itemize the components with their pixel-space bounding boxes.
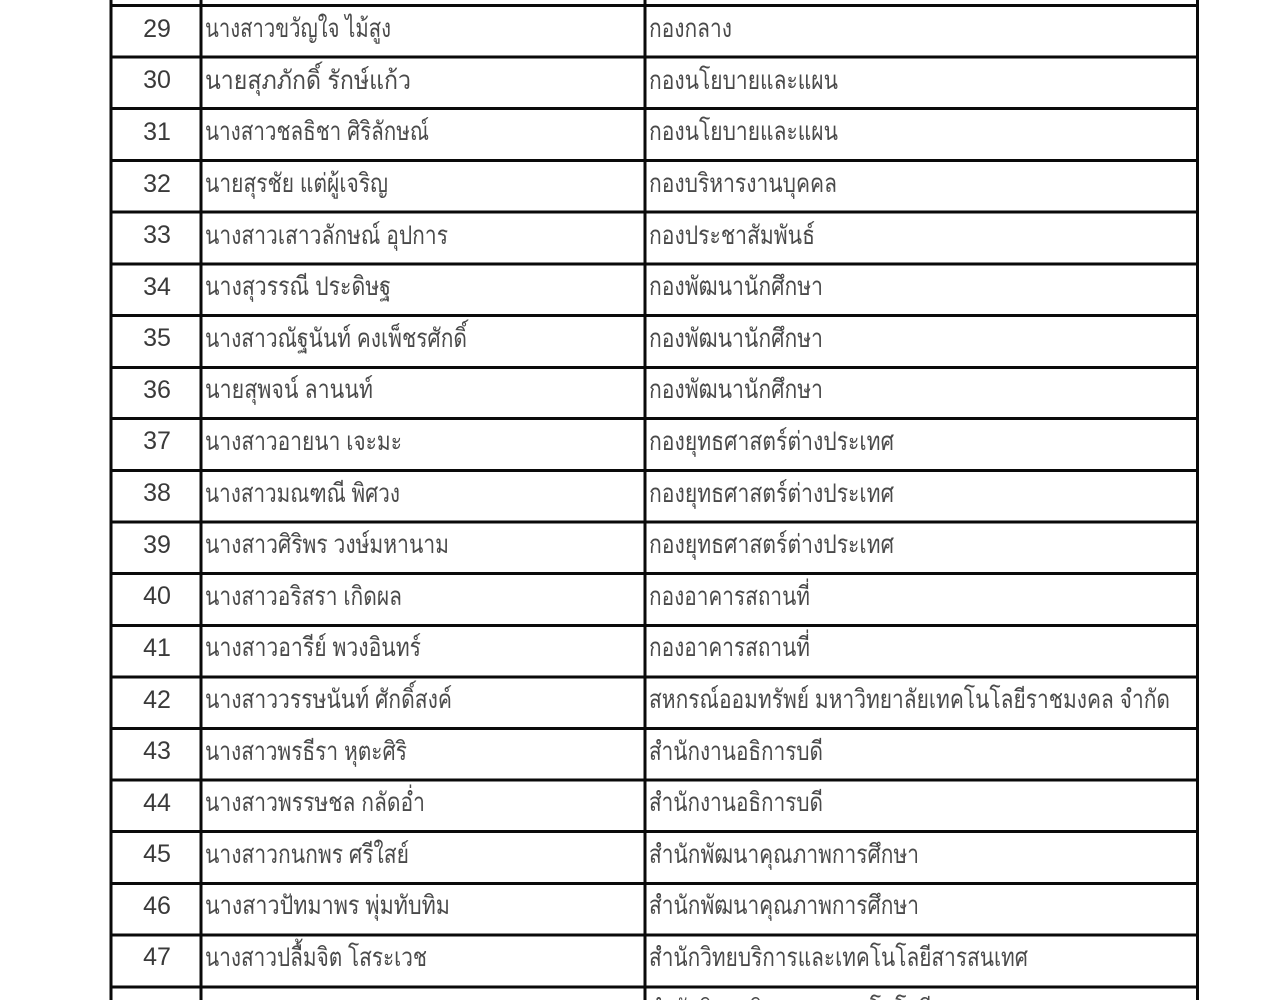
row 46: นางสาวปัทมาพร พุ่มทับทิม [205,890,450,921]
row 38: กองยุทธศาสตร์ต่างประเทศ [649,478,894,509]
row 41 [143,629,810,662]
row 35: นางสาวณัฐนันท์ คงเพ็ชรศักดิ์ [205,319,469,354]
row 39: นางสาวศิริพร วงษ์มหานาม [205,529,449,559]
row 40: กองอาคารสถานที่ [649,578,810,611]
row 33 [143,220,815,251]
row 44 [143,784,823,817]
row 40: นางสาวอริสรา เกิดผล [205,581,402,611]
row 45: นางสาวกนกพร ศรีใสย์ [205,839,409,869]
row 35 [143,319,823,354]
row 39: กองยุทธศาสตร์ต่างประเทศ [649,529,894,560]
row 45 [143,839,919,870]
row 29: นางสาวขวัญใจ ไม้สูง [205,13,391,44]
row 44: สำนักงานอธิการบดี [649,787,823,817]
row 32: กองบริหารงานบุคคล [649,168,837,199]
row 45: 45 [143,840,171,868]
row 46: สำนักพัฒนาคุณภาพการศึกษา [649,890,919,921]
row 42: สหกรณ์ออมทรัพย์ มหาวิทยาลัยเทคโนโลยีราชมงคล จำกัด [649,684,1170,714]
row 31: กองนโยบายและแผน [649,116,838,146]
row 47 [143,938,1028,972]
row 37: 37 [143,427,171,455]
row 30: กองนโยบายและแผน [649,65,838,95]
row 38: นางสาวมณฑณี พิศวง [205,478,400,508]
row 30: 30 [143,66,171,94]
row 36: 36 [143,376,171,404]
row 44: 44 [143,789,171,817]
row 34 [143,271,823,302]
row 46: 46 [143,892,171,920]
row 36: กองพัฒนานักศึกษา [649,374,823,404]
row 32: นายสุรชัย แต่ผู้เจริญ [205,168,388,199]
row 35: กองพัฒนานักศึกษา [649,323,823,353]
row 43: สำนักงานอธิการบดี [649,736,823,766]
row 34: นางสุวรรณี ประดิษฐ [205,271,391,302]
row 47: 47 [143,943,171,971]
row 45: สำนักพัฒนาคุณภาพการศึกษา [649,839,919,870]
row 40 [143,578,810,611]
row 38 [143,478,894,509]
row 41: กองอาคารสถานที่ [649,629,810,662]
row 38: 38 [143,479,171,507]
row 41: นางสาวอารีย์ พวงอินทร์ [205,632,421,662]
row 41: 41 [143,634,171,662]
row 29: 29 [143,15,171,43]
row 36: นายสุพจน์ ลานนท์ [205,374,373,405]
row 34: 34 [143,273,171,301]
row 39 [143,529,894,560]
row 33: นางสาวเสาวลักษณ์ อุปการ [205,220,448,251]
row 32 [143,168,837,199]
row 37: กองยุทธศาสตร์ต่างประเทศ [649,426,894,457]
row 43 [143,736,823,767]
row 30: นายสุภภักดิ์ รักษ์แก้ว [205,61,411,96]
row 37 [143,426,894,457]
row 30 [143,61,838,96]
row 29 [143,13,732,44]
row 37: นางสาวอายนา เจะมะ [205,426,402,456]
row 31: 31 [143,118,171,146]
row 34: กองพัฒนานักศึกษา [649,271,823,301]
row 42: 42 [143,686,171,714]
row 33: กองประชาสัมพันธ์ [649,220,815,250]
row 42 [143,680,1170,714]
row 35: 35 [143,324,171,352]
row 32: 32 [143,170,171,198]
row 40: 40 [143,582,171,610]
row 44: นางสาวพรรษชล กลัดอ่ำ [205,784,425,817]
row 42: นางสาววรรษนันท์ ศักดิ์สงค์ [205,680,452,714]
row 43: นางสาวพรธีรา หุตะศิริ [205,736,407,767]
row 48, clipped at the page edge [143,994,1028,1000]
row 43: 43 [143,737,171,765]
row 46 [143,890,919,921]
row 39: 39 [143,531,171,559]
row 36 [143,374,823,405]
row 47: นางสาวปลื้มจิต โสระเวช [205,938,427,972]
row 47: สำนักวิทยบริการและเทคโนโลยีสารสนเทศ [649,942,1028,972]
row 29: กองกลาง [649,13,732,43]
row 31 [143,116,838,146]
row 33: 33 [143,221,171,249]
row 31: นางสาวชลธิชา ศิริลักษณ์ [205,116,429,146]
